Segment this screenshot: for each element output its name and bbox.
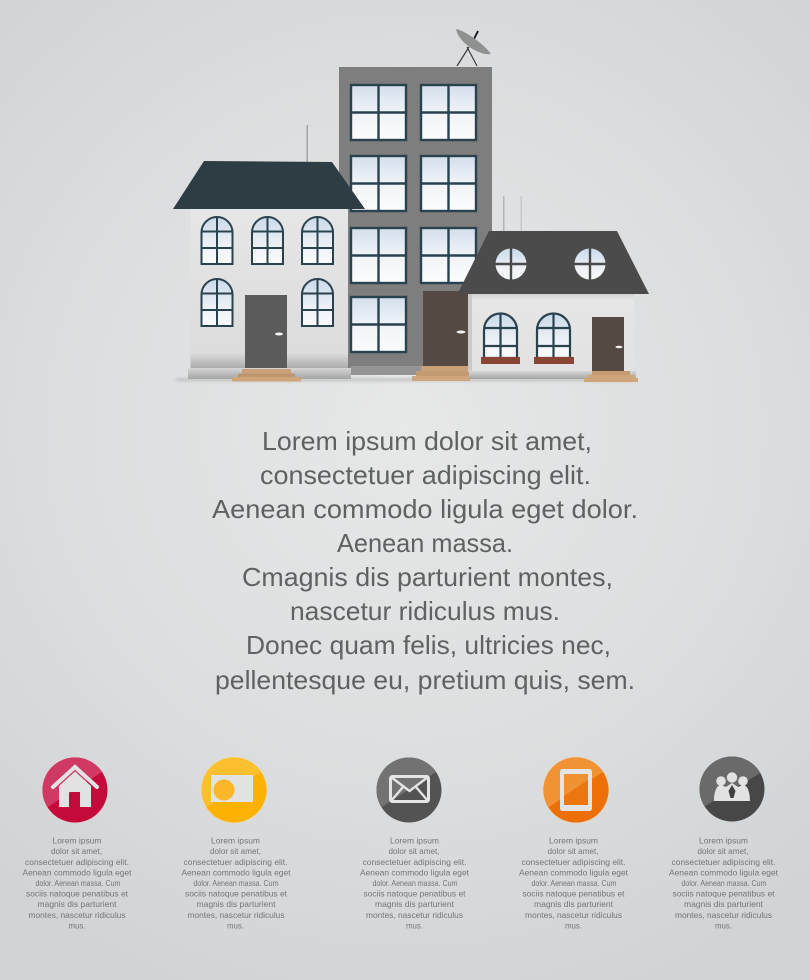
- text: column 2: magnis dis parturient: [196, 899, 276, 909]
- text: column 3: sociis natoque penatibus et: [364, 888, 466, 898]
- text: column 3: [360, 836, 470, 930]
- text: column 5: montes, nascetur ridiculus: [675, 910, 772, 920]
- text: column 4: montes, nascetur ridiculus: [525, 910, 622, 920]
- text: column 5: magnis dis parturient: [684, 899, 764, 909]
- text: column 4: dolor. Aenean massa. Cum: [532, 878, 616, 888]
- text: column 5: consectetuer adipiscing elit.: [672, 857, 776, 867]
- text: column 1: sociis natoque penatibus et: [26, 888, 129, 898]
- icon: camera card: [201, 757, 267, 823]
- text: column 2: consectetuer adipiscing elit.: [184, 857, 288, 867]
- text: column 4: magnis dis parturient: [534, 899, 614, 909]
- text: column 5: mus.: [715, 920, 732, 930]
- text: column 2: [182, 836, 291, 930]
- tower building: [339, 67, 492, 375]
- icon: people: [700, 756, 764, 822]
- text: column 2: sociis natoque penatibus et: [185, 888, 288, 898]
- text: column 5: sociis natoque penatibus et: [672, 888, 775, 898]
- text: column 2: dolor. Aenean massa. Cum: [194, 878, 278, 888]
- text: column 3: dolor sit amet,: [388, 846, 440, 856]
- lead paragraph: Aenean massa.: [337, 528, 513, 558]
- house left: [173, 161, 365, 379]
- text: column 1: magnis dis parturient: [38, 899, 117, 909]
- text: column 5: [669, 836, 779, 930]
- lead paragraph: consectetuer adipiscing elit.: [260, 460, 591, 490]
- text: column 4: [519, 836, 629, 930]
- text: column 3: magnis dis parturient: [375, 899, 455, 909]
- text: column 3: dolor. Aenean massa. Cum: [372, 878, 458, 888]
- text: column 3: Aenean commodo ligula eget: [360, 868, 470, 878]
- text: column 5: Lorem ipsum: [699, 836, 748, 846]
- text: column 2: Lorem ipsum: [211, 836, 260, 846]
- text: column 3: mus.: [406, 920, 423, 930]
- text: column 1: consectetuer adipiscing elit.: [25, 857, 129, 867]
- text: column 4: Lorem ipsum: [549, 836, 598, 846]
- text: column 1: Lorem ipsum: [52, 836, 102, 846]
- text: column 5: dolor sit amet,: [698, 846, 748, 856]
- text: column 4: Aenean commodo ligula eget: [519, 868, 629, 878]
- text: column 4: mus.: [565, 920, 582, 930]
- text: column 2: Aenean commodo ligula eget: [182, 868, 291, 878]
- icon: home: [42, 757, 108, 823]
- text: column 2: montes, nascetur ridiculus: [188, 910, 284, 920]
- illustration: buildings: [173, 29, 649, 382]
- text: column 5: Aenean commodo ligula eget: [669, 868, 779, 878]
- text: column 1: dolor. Aenean massa. Cum: [36, 878, 120, 888]
- lead paragraph: pellentesque eu, pretium quis, sem.: [215, 665, 635, 695]
- text: column 1: [22, 836, 132, 930]
- text: column 4: dolor sit amet,: [548, 846, 598, 856]
- icon: tablet: [543, 757, 609, 823]
- text: column 1: mus.: [68, 920, 86, 930]
- text: column 1: montes, nascetur ridiculus: [28, 910, 126, 920]
- text: column 1: dolor sit amet,: [51, 846, 102, 856]
- text: column 3: montes, nascetur ridiculus: [366, 910, 463, 920]
- text: column 4: consectetuer adipiscing elit.: [522, 857, 626, 867]
- lead paragraph: nascetur ridiculus mus.: [290, 596, 560, 626]
- text: column 5: dolor. Aenean massa. Cum: [682, 878, 766, 888]
- text: column 3: consectetuer adipiscing elit.: [362, 857, 466, 867]
- text: column 4: sociis natoque penatibus et: [522, 888, 625, 898]
- house right: [459, 231, 649, 379]
- text: column 2: mus.: [227, 920, 244, 930]
- text: column 3: Lorem ipsum: [390, 836, 439, 846]
- lead paragraph: [212, 426, 638, 695]
- icon: envelope: [376, 758, 442, 822]
- text: column 2: dolor sit amet,: [210, 846, 261, 856]
- satellite dish: [456, 29, 491, 66]
- text: column 1: Aenean commodo ligula eget: [22, 868, 132, 878]
- lead paragraph: Aenean commodo ligula eget dolor.: [212, 494, 638, 524]
- lead paragraph: Donec quam felis, ultricies nec,: [246, 630, 611, 660]
- lead paragraph: Cmagnis dis parturient montes,: [242, 562, 613, 592]
- antennas: [306, 125, 522, 231]
- house left steps: [232, 369, 301, 382]
- ground shadow: [176, 378, 636, 381]
- lead paragraph: Lorem ipsum dolor sit amet,: [262, 426, 592, 456]
- house right steps: [584, 371, 638, 382]
- tower door steps: [412, 366, 472, 381]
